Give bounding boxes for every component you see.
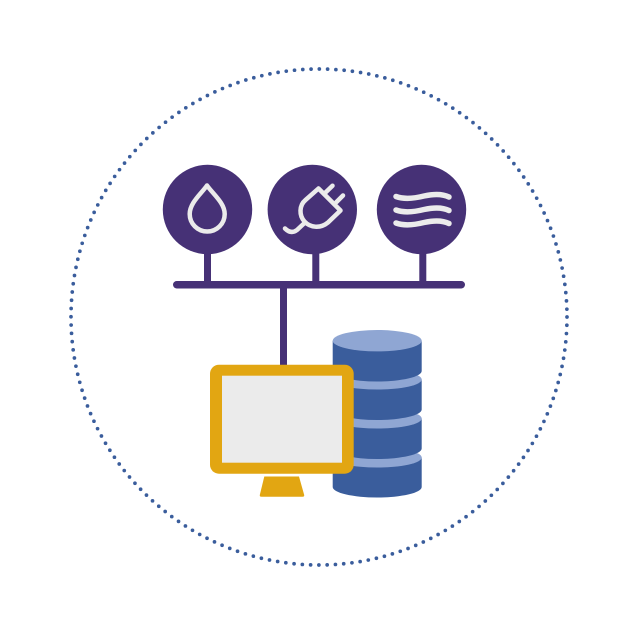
icon: electric plug [268, 165, 357, 254]
monitor frame [210, 365, 354, 474]
icon: water drop [163, 165, 252, 254]
connector network [173, 250, 465, 370]
dotted circle border [71, 69, 567, 565]
computer monitor [210, 365, 354, 497]
database cylinder [333, 330, 422, 498]
monitor screen [222, 376, 342, 463]
monitor stand [260, 476, 304, 497]
icon: air waves [377, 165, 466, 254]
